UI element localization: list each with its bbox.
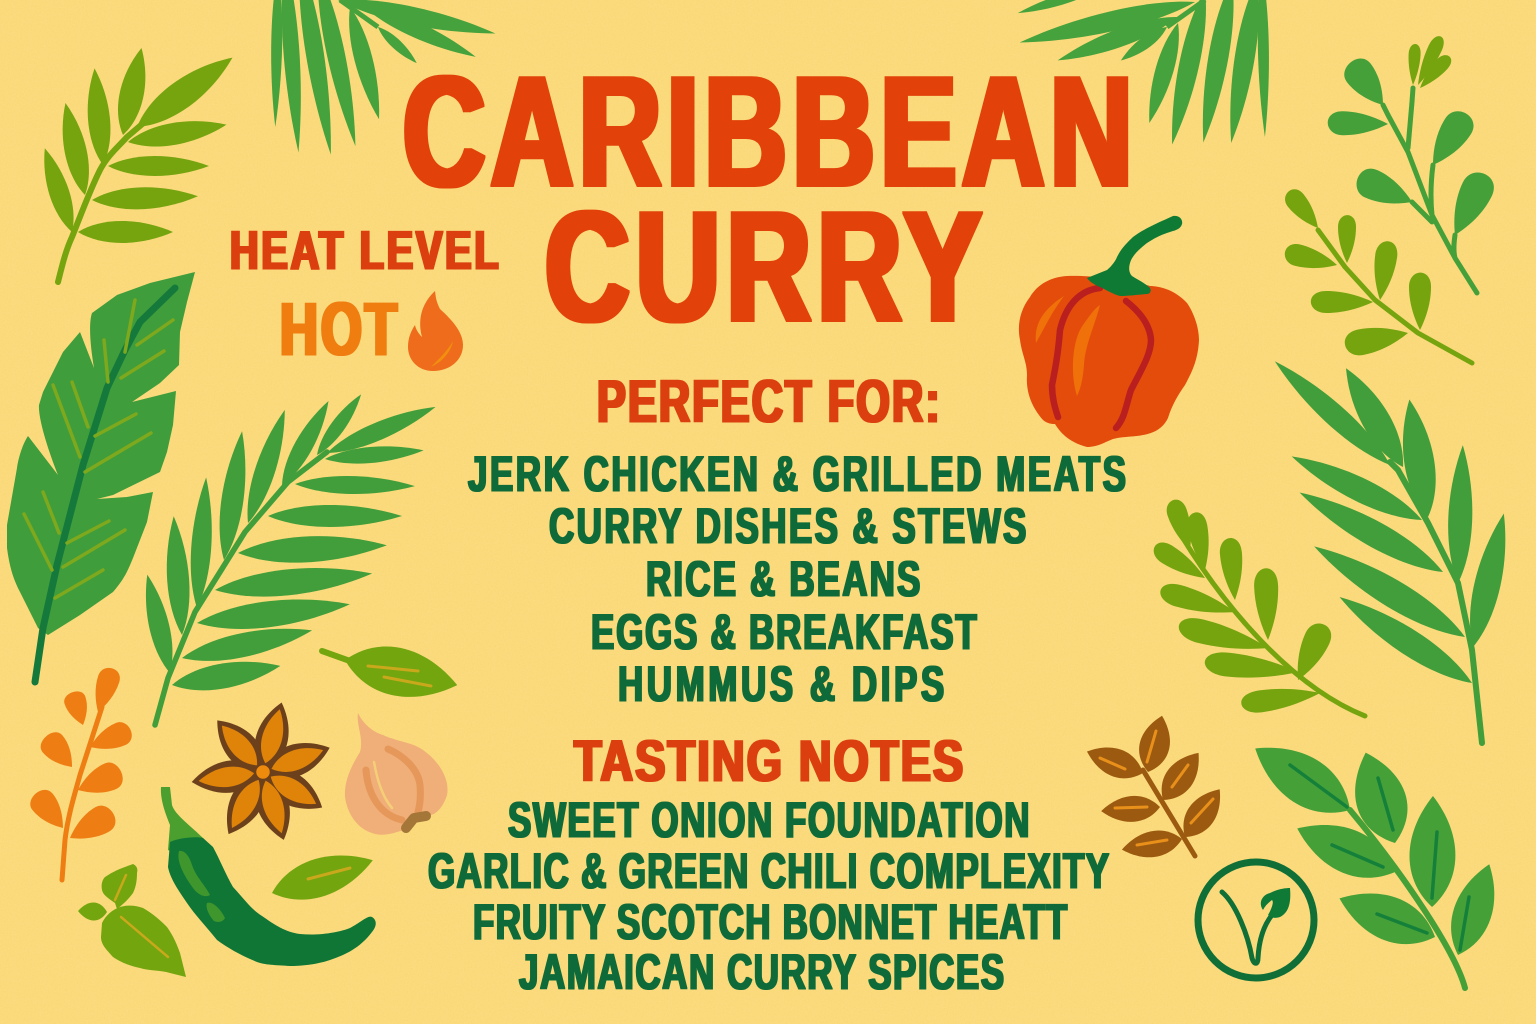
list: tasting notes items: FRUITY SCOTCH BONNET HEATT xyxy=(473,895,1067,951)
list: perfect for items: RICE & BEANS xyxy=(646,552,920,608)
herb: top right green sprig xyxy=(1328,34,1499,293)
title: CARIBBEAN xyxy=(403,44,1132,220)
list: perfect for items xyxy=(468,447,1126,713)
icon: flame xyxy=(408,291,463,371)
herb: bottom right green sprig xyxy=(1242,728,1507,988)
heading: tasting notes: TASTING NOTES xyxy=(574,730,963,794)
heat level label: HEAT LEVEL xyxy=(230,221,499,282)
frond: upper left olive fern xyxy=(35,45,241,282)
icon: basil sprig xyxy=(78,864,186,977)
list: tasting notes items: JAMAICAN CURRY SPICES xyxy=(519,945,1004,1001)
icon: vegan symbol xyxy=(1198,862,1314,978)
leaf: small olive leaf xyxy=(322,637,462,708)
icon: shallot xyxy=(345,713,448,835)
list: perfect for items: CURRY DISHES & STEWS xyxy=(549,499,1026,555)
list: perfect for items: EGGS & BREAKFAST xyxy=(591,605,977,661)
herb: orange sprig xyxy=(26,665,135,880)
frond: top left palm xyxy=(270,0,497,156)
herb: lower right olive sprig xyxy=(1149,497,1365,716)
list: tasting notes items: SWEET ONION FOUNDATION xyxy=(508,793,1030,849)
title xyxy=(403,44,1132,355)
list: tasting notes items: GARLIC & GREEN CHILI COMPLEXITY xyxy=(428,844,1109,900)
heading: perfect for: PERFECT FOR: xyxy=(597,369,940,436)
icon: scotch bonnet pepper xyxy=(1019,216,1199,447)
heat rating: hot: HOT xyxy=(280,287,397,371)
frond: center left palm xyxy=(138,390,439,725)
frond: right palm xyxy=(1267,353,1516,743)
icon: green chili xyxy=(161,787,376,966)
list: perfect for items: JERK CHICKEN & GRILLED MEATS xyxy=(468,447,1126,503)
list: perfect for items: HUMMUS & DIPS xyxy=(618,657,944,713)
herb: brown sprig xyxy=(1082,712,1231,862)
leaf: small olive leaf near chili xyxy=(266,842,379,911)
list: tasting notes items xyxy=(428,793,1109,1001)
leaf: large banana leaf xyxy=(7,272,195,682)
frond: top right palm xyxy=(1016,0,1270,147)
title: CURRY xyxy=(545,179,982,355)
herb: upper right olive sprig xyxy=(1281,185,1472,363)
icon: star anise xyxy=(189,698,335,845)
